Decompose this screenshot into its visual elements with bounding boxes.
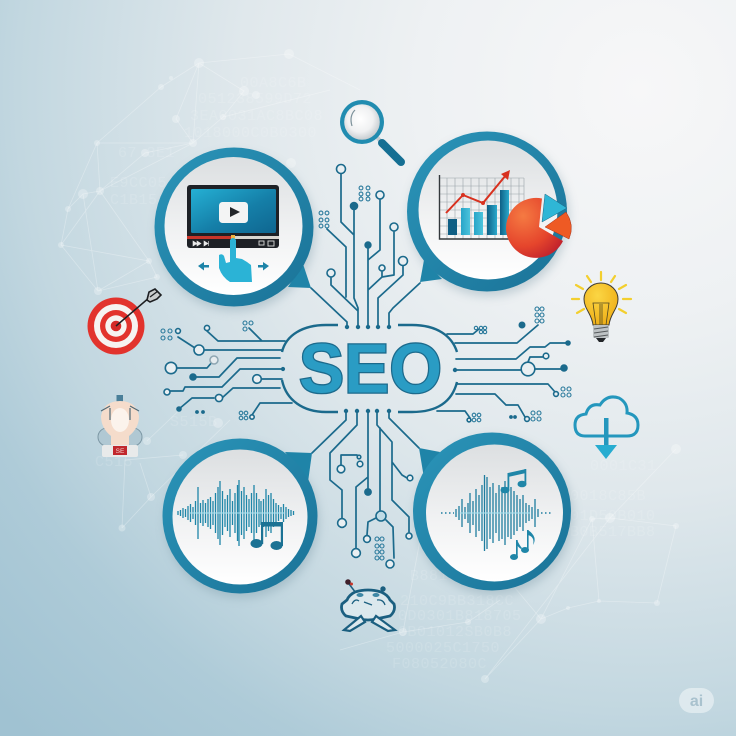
circuit traces left [161,321,292,420]
faint data digits: 5000025C1750 [386,640,500,657]
faint data digits: 210C9BB318CC [400,593,514,610]
trend line arrow [446,170,510,213]
icon: small music notes [510,530,535,560]
faint data digits: 01D50B010 [570,508,656,525]
icon: left and right arrows [198,262,269,270]
bar chart [439,175,524,239]
faint data digits: 0B01012SB0B8 [398,624,512,641]
icon: pointing hand [219,238,252,282]
faint data digits: 1018000C0B0300 [184,125,317,142]
circuit traces bottom [312,409,419,568]
faint data digits: 0D0301B818705 [398,608,522,625]
circuit traces right [437,307,571,422]
circuit traces top [311,164,420,329]
icon: cloud download [575,397,638,459]
watermark badge: ai [690,693,703,710]
icon: magnifying glass [340,100,401,162]
icon: video player [187,185,279,248]
network mesh background top left [58,49,360,295]
waveform [178,480,294,546]
faint data digits: C515 [95,454,133,471]
icon: lightbulb figure [98,395,142,457]
waveform [441,475,551,551]
faint data digits: F08052080C [392,656,487,673]
icon: beamed music note [500,469,526,493]
faint data digits: B8810 [410,568,458,585]
panel: analytics chart [407,132,571,296]
faint data digits: 3EA0031AC8BC08 [190,108,323,125]
network mesh background bottom left [118,400,230,532]
icon: robot [342,579,395,631]
faint data digits: 0001C31 [590,458,657,475]
faint data digits: C1B15 [110,192,158,209]
panel: waveform with notes left [162,438,319,598]
faint data digits: 051238599D72 [198,91,312,108]
faint data digits: E9CC05 [110,175,167,192]
faint data digits: 0018C85B [570,488,646,505]
faint data digits: B0B517BB8 [570,524,656,541]
faint data digits: 00A8C6B [240,75,307,92]
network mesh background bottom right [340,444,681,683]
SEO title text: SEO [299,330,442,408]
faint data digits [95,75,657,673]
faint data digits: 67 8E1 [118,145,175,162]
faint data digits: S515B [170,414,218,431]
watermark badge [679,688,714,713]
panel: waveform with notes right [413,432,573,595]
SEO central badge [282,325,457,412]
icon: lightbulb figure: SE [116,448,125,455]
icon: music notes [250,522,283,550]
icon: target with arrow [88,289,161,354]
panel: video [154,148,315,311]
icon: light bulb [572,272,631,342]
pie chart [506,194,571,258]
